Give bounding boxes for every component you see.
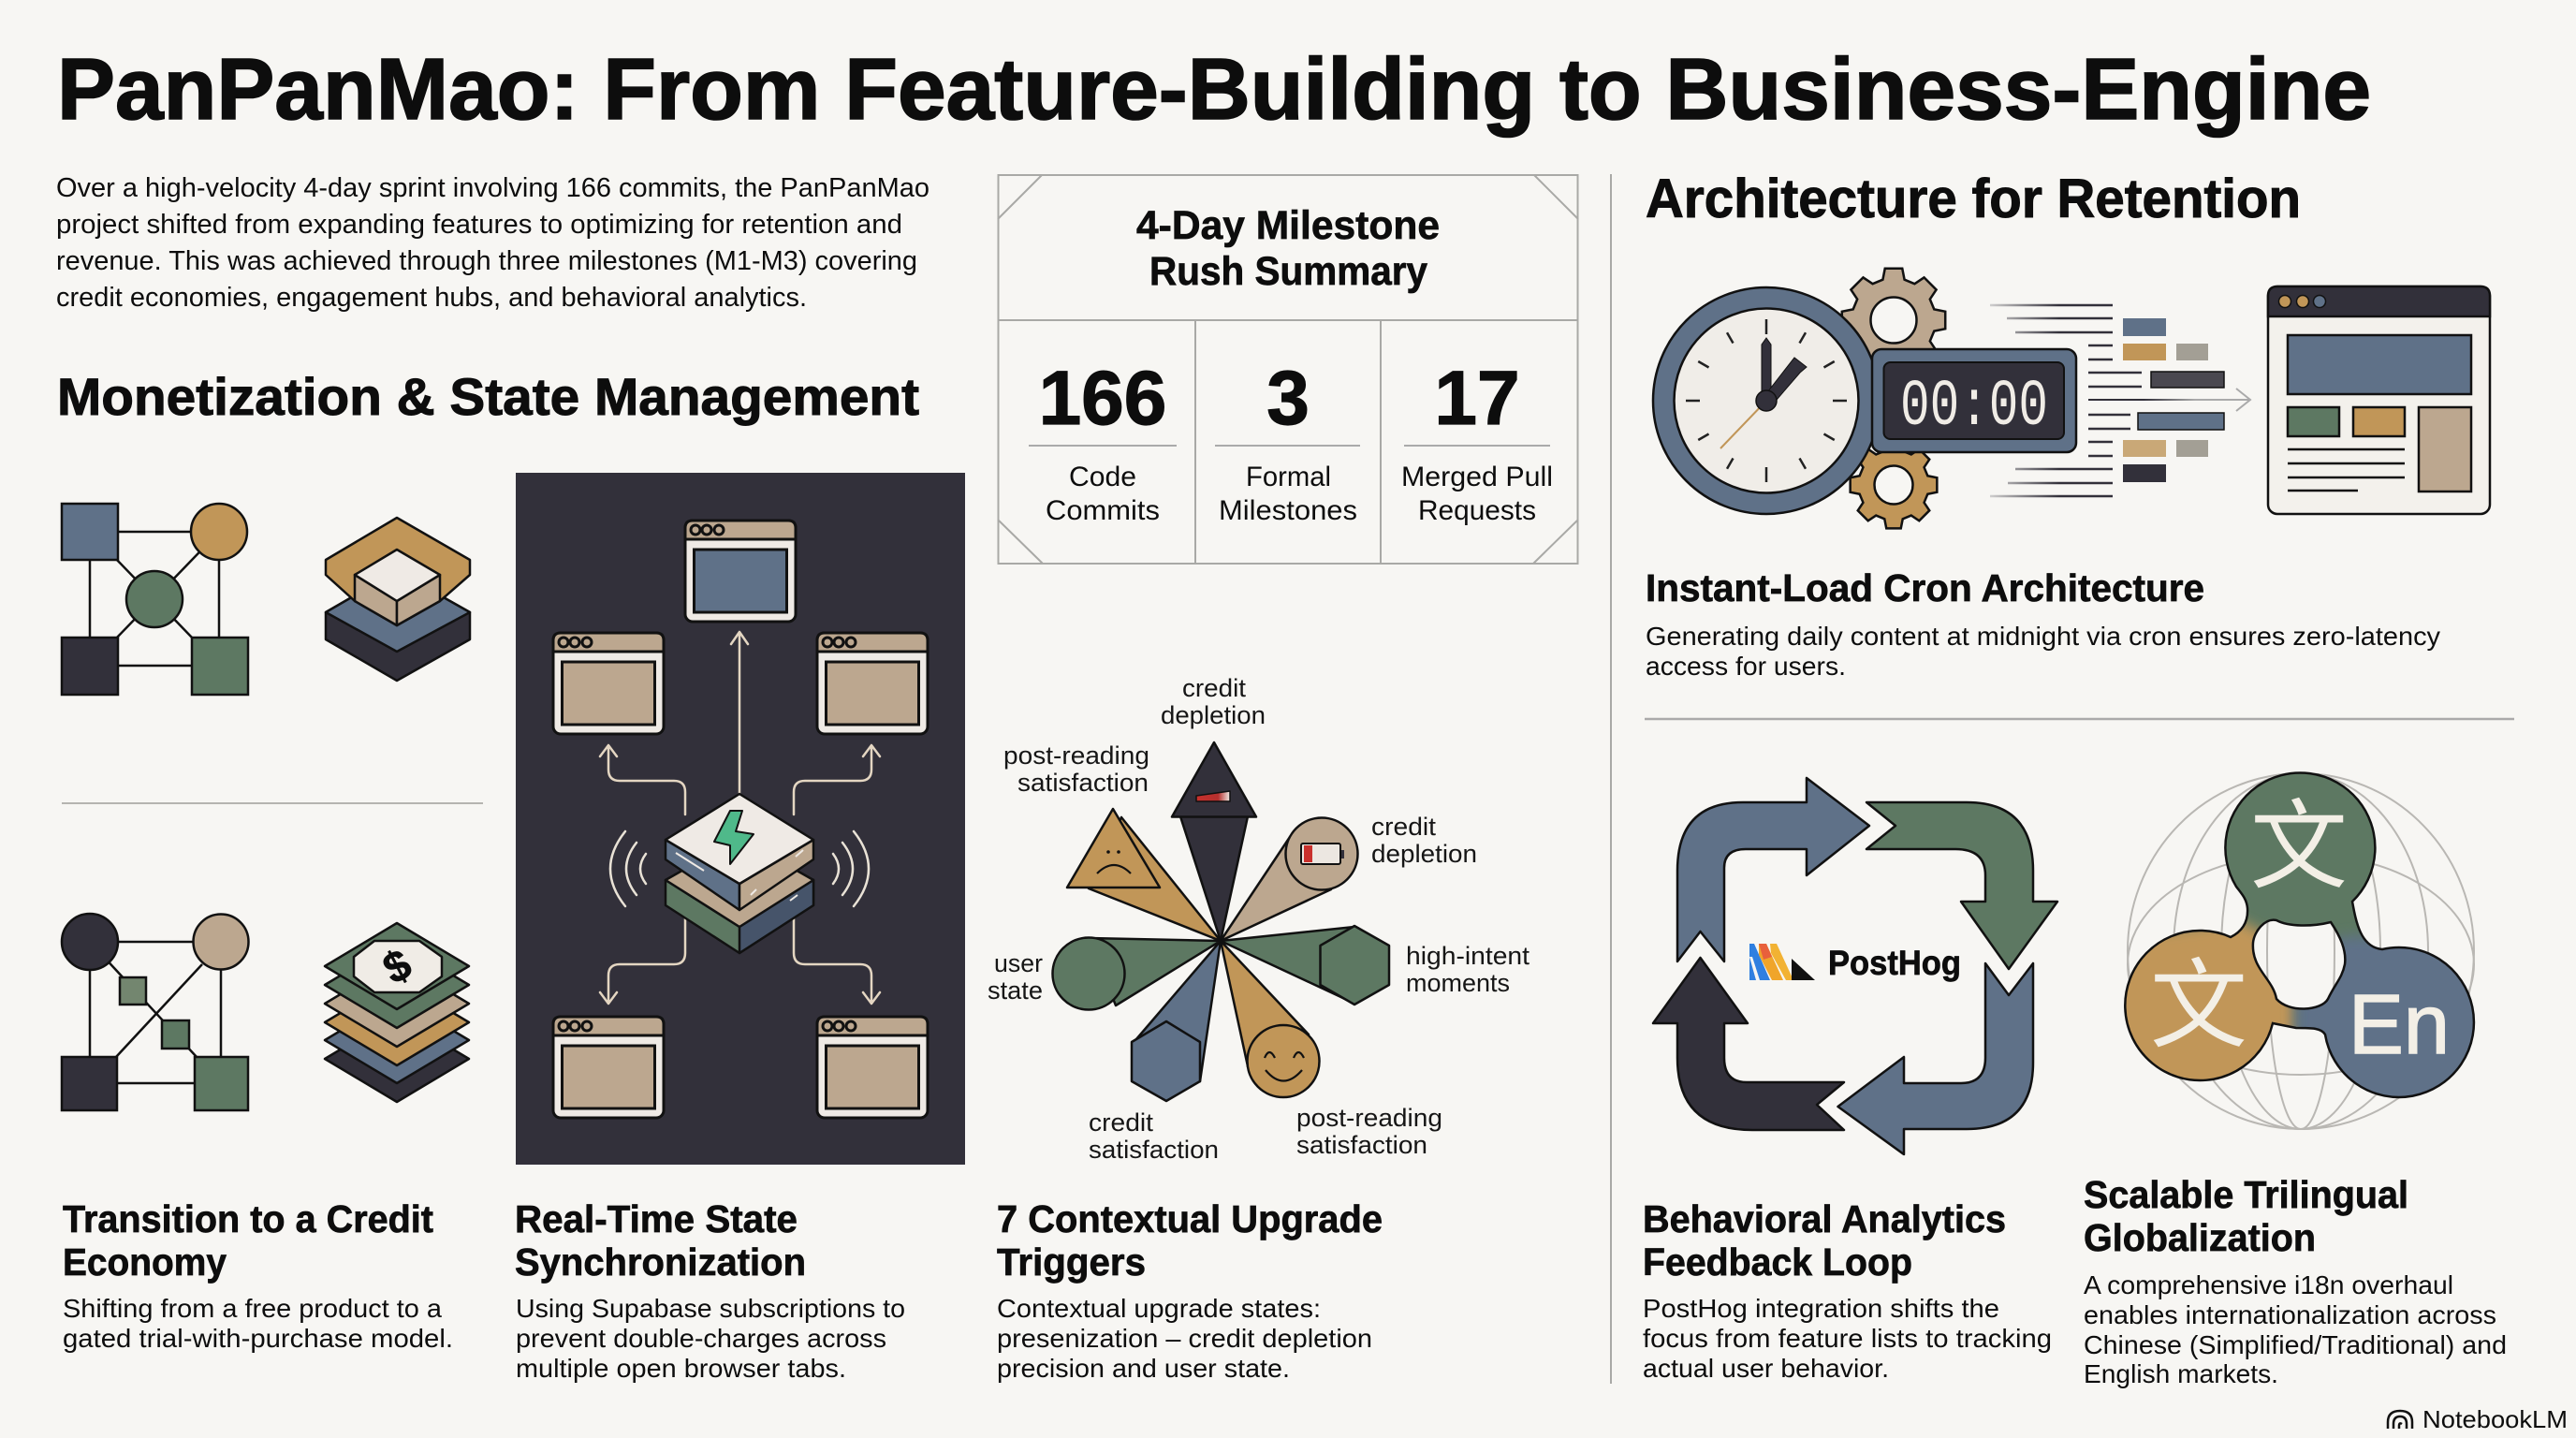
trigger labels: credit: [1089, 1108, 1154, 1137]
title: PanPanMao: From Feature-Building to Business-Engine: [57, 40, 2371, 138]
icon: stacked credit layers with dollar: [325, 923, 469, 1102]
caption: transition to a credit economy: [63, 1197, 453, 1353]
caption: behavioral analytics feedback loop: Behavioral Analytics: [1643, 1197, 2006, 1240]
icon: globe with language blobs: [2124, 771, 2475, 1130]
icon: isometric layered block: [326, 518, 470, 681]
spoke: smiling circle: [1221, 941, 1320, 1097]
caption: scalable trilingual globalization: Globalization: [2084, 1216, 2316, 1259]
trigger labels: state: [988, 976, 1043, 1005]
spoke: dark triangle, credit depletion: [1172, 742, 1256, 941]
signal waves: [610, 831, 869, 906]
summary heading: [1136, 203, 1440, 294]
icon: behavioral analytics feedback loop: [1653, 778, 2057, 1154]
stat: 166 code commits: Code: [1069, 462, 1136, 492]
stat: 3 formal milestones: [1215, 356, 1360, 526]
stat: 166 code commits: [1029, 356, 1177, 526]
caption: behavioral analytics feedback loop: PostHog integration shifts the: [1643, 1294, 1999, 1323]
posthog logo: [1749, 944, 1961, 982]
chart: 7 contextual upgrade triggers radial diagram: [988, 674, 1530, 1164]
trigger labels: satisfaction: [1296, 1131, 1427, 1159]
caption: scalable trilingual globalization: Scalable Trilingual: [2084, 1173, 2408, 1216]
caption: 7 contextual upgrade triggers: 7 Contextual Upgrade: [997, 1197, 1383, 1240]
trigger labels: satisfaction: [1017, 769, 1149, 797]
browser window: right: [817, 633, 928, 734]
browser page result: [2268, 286, 2490, 514]
caption: 7 contextual upgrade triggers: [997, 1197, 1383, 1383]
spoke: tan circle with low battery: [1221, 818, 1357, 941]
spoke: frowning orange triangle: [1067, 809, 1221, 941]
caption: behavioral analytics feedback loop: [1643, 1197, 2052, 1383]
trigger labels: credit: [1182, 674, 1247, 702]
caption: behavioral analytics feedback loop: Feedback Loop: [1643, 1240, 1912, 1284]
arrows from hub to browser windows: [600, 632, 880, 1004]
icon: node graph with central circle: [62, 504, 248, 695]
trigger labels: depletion: [1371, 840, 1477, 868]
caption: real-time state synchronization: Synchronization: [515, 1240, 806, 1284]
stat: 17 merged pull requests: [1401, 356, 1553, 526]
section heading: architecture: Architecture for Retention: [1646, 169, 2301, 229]
connected language blobs: [2127, 773, 2473, 1096]
caption: real-time state synchronization: prevent double-charges across: [516, 1324, 886, 1353]
illustration: instant-load cron: [1653, 269, 2490, 528]
stat: 3 formal milestones: 3: [1266, 356, 1310, 441]
icon: analog clock: [1653, 287, 1880, 514]
intro paragraph: Over a high-velocity 4-day sprint involving 166 commits, the PanPanMao: [56, 173, 929, 203]
browser window: bottom left: [553, 1017, 664, 1118]
digital display 00:00: [1872, 349, 2076, 452]
caption: scalable trilingual globalization: [2084, 1173, 2507, 1388]
intro paragraph: revenue. This was achieved through three milestones (M1-M3) covering: [56, 246, 917, 276]
caption: transition to a credit economy: gated trial-with-purchase model.: [63, 1324, 453, 1353]
content blocks in transit: [2123, 318, 2224, 482]
caption: transition to a credit economy: Transition to a Credit: [63, 1197, 433, 1240]
intro paragraph: credit economies, engagement hubs, and behavioral analytics.: [56, 283, 807, 313]
language glyphs: 文: [2250, 793, 2348, 902]
caption: scalable trilingual globalization: enables internationalization across: [2084, 1300, 2496, 1329]
icon: stacked credit layers with dollar: $: [374, 939, 419, 993]
caption: real-time state synchronization: [515, 1197, 905, 1383]
caption: 7 contextual upgrade triggers: Contextual upgrade states:: [997, 1294, 1321, 1323]
caption: 7 contextual upgrade triggers: Triggers: [997, 1240, 1146, 1284]
panel: real-time sync dark panel: [516, 473, 965, 1165]
right column divider: [1645, 718, 2514, 720]
caption: 7 contextual upgrade triggers: presenization – credit depletion: [997, 1324, 1372, 1353]
caption: 7 contextual upgrade triggers: precision and user state.: [997, 1354, 1290, 1383]
trigger labels: post-reading: [1296, 1104, 1442, 1132]
spoke: green circle: [1052, 938, 1221, 1009]
stat: 166 code commits: Commits: [1046, 495, 1160, 526]
browser window: top: [685, 521, 796, 622]
digital display 00:00: 00:00: [1900, 371, 2048, 445]
intro paragraph: project shifted from expanding features to optimizing for retention and: [56, 210, 902, 240]
globe wireframe: [2128, 773, 2474, 1129]
stat: 3 formal milestones: Milestones: [1219, 495, 1357, 526]
language glyphs: En: [2349, 978, 2450, 1072]
posthog logo: PostHog: [1828, 944, 1961, 982]
speed lines: [1990, 305, 2250, 496]
trigger labels: moments: [1406, 969, 1510, 997]
trigger labels: [988, 674, 1530, 1164]
section heading: monetization: Monetization & State Management: [57, 367, 919, 426]
caption: instant-load cron architecture: [1646, 566, 2440, 681]
icon: supabase hub server: [666, 794, 813, 953]
icon: credit flow graph: [62, 914, 249, 1110]
caption: behavioral analytics feedback loop: focus from feature lists to tracking: [1643, 1324, 2052, 1353]
intro paragraph: [56, 173, 929, 313]
trigger labels: post-reading: [1003, 741, 1149, 770]
trigger labels: high-intent: [1406, 942, 1530, 970]
icon: gears: [1842, 269, 1945, 528]
stat: 17 merged pull requests: 17: [1434, 356, 1520, 441]
caption: real-time state synchronization: Using Supabase subscriptions to: [516, 1294, 905, 1323]
caption: real-time state synchronization: Real-Time State: [515, 1197, 798, 1240]
stat: 166 code commits: 166: [1039, 356, 1166, 441]
browser window: bottom right: [817, 1017, 928, 1118]
trigger labels: user: [994, 949, 1043, 977]
caption: scalable trilingual globalization: Chinese (Simplified/Traditional) and: [2084, 1330, 2507, 1359]
caption: instant-load cron architecture: Generating daily content at midnight via cron ensures zero-latency: [1646, 622, 2440, 651]
language glyphs: [2150, 793, 2450, 1072]
trigger labels: credit: [1371, 813, 1437, 841]
spoke: green hexagon: [1221, 926, 1389, 1005]
spoke: blue hexagon: [1132, 941, 1221, 1101]
stat: 3 formal milestones: Formal: [1246, 462, 1331, 492]
summary heading: Rush Summary: [1149, 249, 1427, 294]
trigger labels: satisfaction: [1089, 1136, 1219, 1164]
caption: scalable trilingual globalization: A comprehensive i18n overhaul: [2084, 1270, 2453, 1299]
divider between credit icon rows: [62, 802, 483, 804]
language glyphs: 文: [2150, 952, 2247, 1061]
caption: instant-load cron architecture: Instant-Load Cron Architecture: [1646, 566, 2204, 609]
caption: instant-load cron architecture: access for users.: [1646, 652, 1846, 681]
caption: real-time state synchronization: multiple open browser tabs.: [516, 1354, 846, 1383]
caption: scalable trilingual globalization: English markets.: [2084, 1359, 2278, 1388]
notebooklm watermark: NotebookLM: [2422, 1405, 2568, 1433]
column divider: [1610, 174, 1612, 1384]
stat: 17 merged pull requests: Requests: [1418, 495, 1536, 526]
panel: 4-day milestone summary: [998, 175, 1578, 564]
trigger labels: depletion: [1161, 701, 1266, 729]
stat: 17 merged pull requests: Merged Pull: [1401, 462, 1553, 492]
caption: transition to a credit economy: Shifting from a free product to a: [63, 1294, 442, 1323]
browser window: left: [553, 633, 664, 734]
caption: transition to a credit economy: Economy: [63, 1240, 227, 1284]
summary heading: 4-Day Milestone: [1136, 203, 1440, 248]
caption: behavioral analytics feedback loop: actual user behavior.: [1643, 1354, 1889, 1383]
